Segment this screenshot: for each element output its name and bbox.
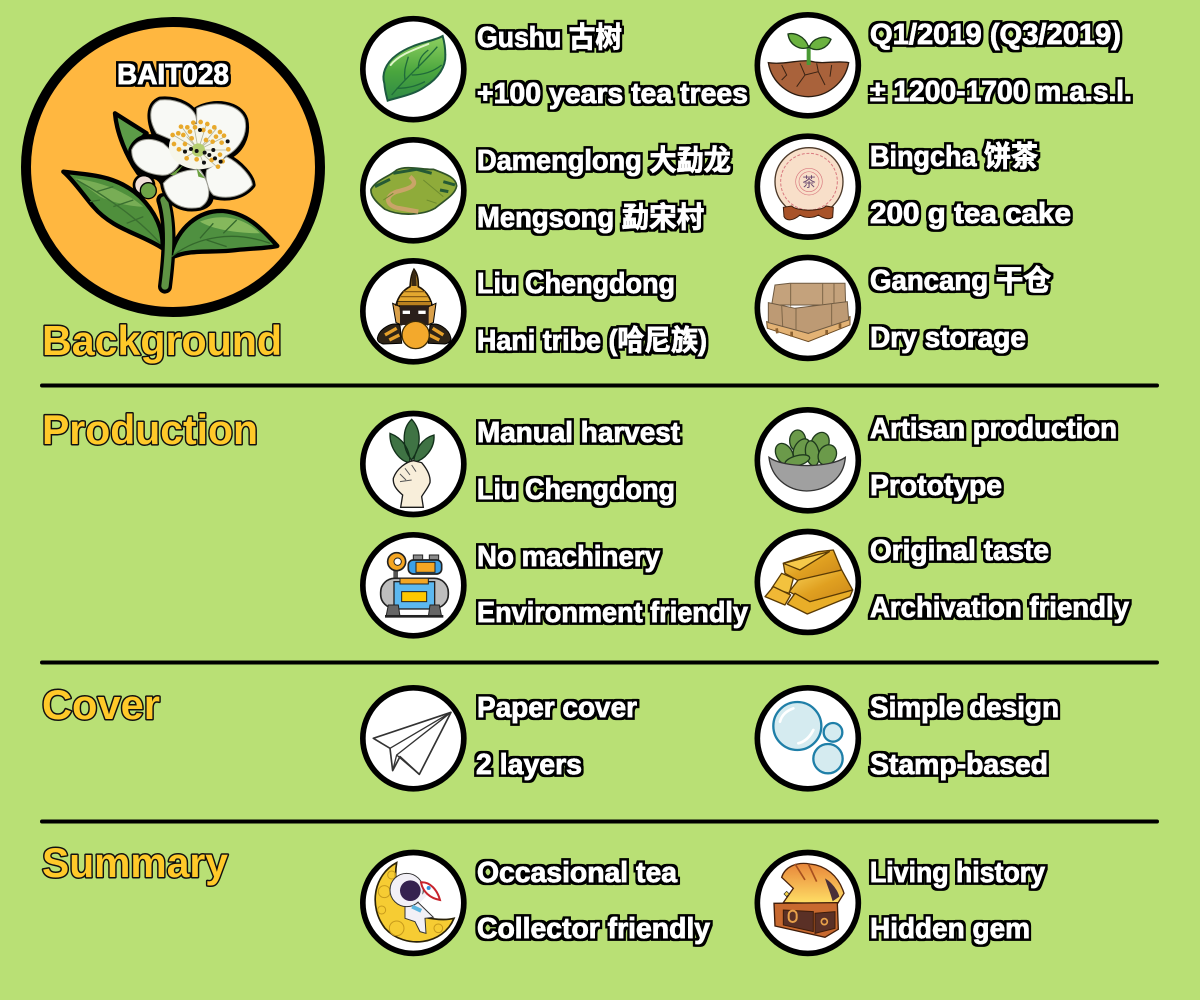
- item: Gancang: [757, 257, 1051, 358]
- icon: treasure chest: [757, 852, 858, 953]
- icon: boxes on pallet: [757, 257, 858, 358]
- text: cake weight: 200 g tea cake: [870, 198, 1071, 230]
- heading: Production: Production: [42, 406, 258, 453]
- text: prototype: Prototype: [870, 470, 1002, 502]
- item: artisan production: [757, 410, 1117, 511]
- icon: paper plane: [363, 688, 464, 789]
- text: Gancang: Gancang 干仓: [870, 265, 1051, 297]
- heading: Background: Background: [42, 317, 282, 364]
- icon: tea cake on stand: [757, 136, 858, 237]
- text: Bingcha: Bingcha 饼茶: [870, 141, 1038, 173]
- item: occasional tea: [363, 852, 710, 953]
- text: hidden gem: Hidden gem: [870, 913, 1030, 945]
- panel: production section: [42, 406, 1129, 636]
- flower outline layer: [131, 100, 252, 208]
- icon: bubbles: [757, 688, 858, 789]
- heading: Cover: Cover: [42, 681, 160, 728]
- item: Bingcha: [757, 136, 1071, 237]
- icon: bowl of leaves: [757, 410, 858, 511]
- text: tree age: +100 years tea trees: [477, 78, 748, 110]
- text: manual harvest: Manual harvest: [477, 417, 680, 449]
- icon: tea flower: [63, 100, 277, 287]
- text: collector friendly: Collector friendly: [477, 913, 710, 945]
- text: Mengsong: Mengsong 勐宋村: [477, 202, 704, 234]
- item: no machinery: [363, 535, 748, 636]
- text: artisan production: Artisan production: [870, 413, 1117, 445]
- item: harvest date: [757, 15, 1132, 116]
- badge: tea flower emblem: [26, 22, 320, 312]
- panel: cover section: [42, 681, 1059, 789]
- icon: machine: [363, 535, 464, 636]
- text: no machinery: No machinery: [477, 541, 660, 573]
- badge title: BAIT028: [117, 59, 229, 91]
- text: Liu Chengdong: Liu Chengdong: [477, 268, 675, 300]
- item: paper cover: [363, 688, 637, 789]
- cake stamp: 茶: [802, 175, 816, 190]
- icon: golden guardian: [363, 261, 464, 362]
- panel: summary section: [42, 839, 1045, 953]
- text: paper cover: Paper cover: [477, 692, 637, 724]
- item: original taste: [757, 531, 1129, 632]
- text: original taste: Original taste: [870, 535, 1049, 567]
- text: Damenglong: Damenglong 大勐龙: [477, 145, 731, 177]
- text: producer: Liu Chengdong: [477, 474, 675, 506]
- icon: hand holding leaves: [363, 413, 464, 514]
- text: storage: Dry storage: [870, 322, 1026, 354]
- text: Gushu: Gushu 古树: [477, 22, 622, 54]
- item: simple design: [757, 688, 1059, 789]
- text: altitude: ± 1200-1700 m.a.s.l.: [870, 76, 1132, 108]
- item: Gushu: [363, 19, 748, 120]
- item: living history: [757, 852, 1045, 953]
- icon: gold bars: [757, 531, 858, 632]
- icon: sprout in soil: [757, 15, 858, 116]
- item: Liu Chengdong: [363, 261, 707, 362]
- text: simple design: Simple design: [870, 692, 1059, 724]
- heading: Summary: Summary: [42, 839, 229, 886]
- text: layers: 2 layers: [476, 749, 582, 781]
- item: Damenglong: [363, 140, 731, 241]
- text: harvest quarter: Q1/2019 (Q3/2019): [870, 19, 1121, 51]
- panel: background section: [26, 15, 1132, 364]
- text: stamp based: Stamp-based: [870, 749, 1048, 781]
- item: manual harvest: [363, 413, 680, 514]
- text: environment: Environment friendly: [477, 597, 748, 629]
- icon: astronaut on moon: [363, 852, 464, 953]
- text: archivation: Archivation friendly: [870, 592, 1129, 624]
- icon: green leaf: [363, 19, 464, 120]
- text: living history: Living history: [870, 857, 1045, 889]
- text: Hani tribe: Hani tribe (哈尼族): [477, 325, 707, 357]
- icon: mountain landscape: [363, 140, 464, 241]
- text: occasional tea: Occasional tea: [477, 857, 678, 889]
